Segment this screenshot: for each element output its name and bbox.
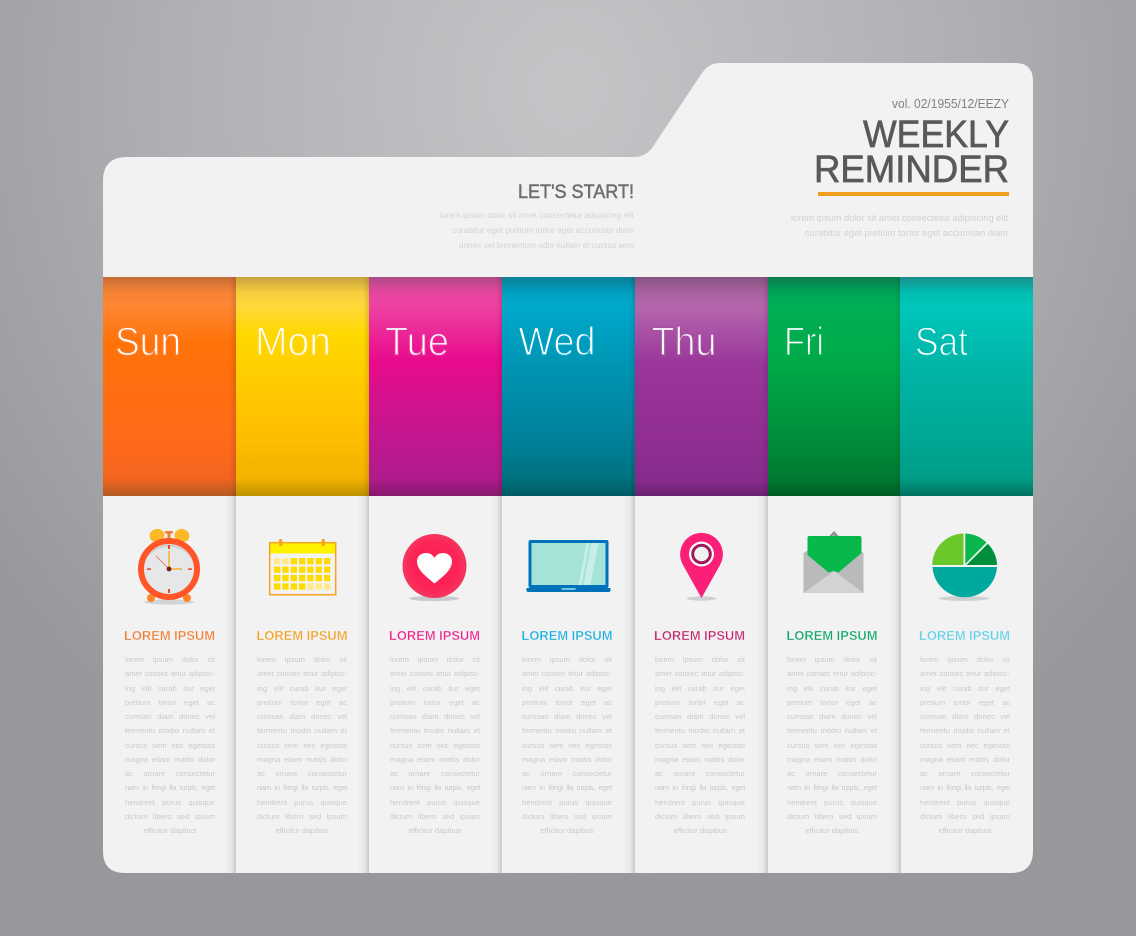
text: Thursday: pretium tortor eget ac	[655, 698, 745, 707]
icon: heart badge	[402, 534, 466, 601]
panel: Friday	[768, 277, 901, 873]
text: Sunday: ing elit curab itur eget	[125, 684, 215, 692]
band: Tuesday: Tue	[385, 320, 449, 364]
text: Monday: amet consec tetur adipisc-	[257, 669, 347, 678]
text: Friday: ac ornare consectetur	[787, 769, 877, 778]
text: Sunday: efficitur dapibus	[143, 826, 197, 835]
text: Monday: lorem ipsum dolor sit	[257, 655, 347, 664]
text: Tuesday: hendrerit purus quisque	[390, 798, 480, 806]
text: Wednesday: dictum libero sed ipsum	[522, 812, 612, 821]
text: Sunday	[125, 655, 216, 835]
panel: Tuesday	[369, 277, 502, 873]
heading: Wednesday: LOREM IPSUM	[521, 628, 612, 643]
text: Thursday: magna etiam mattis dolor	[655, 755, 745, 764]
heading: Sunday: LOREM IPSUM	[124, 628, 215, 643]
heading: let's start: LET'S START!	[518, 182, 634, 203]
text: Monday: fermentu modio nullam et	[257, 726, 347, 735]
text: Saturday: magna etiam mattis dolor	[920, 755, 1010, 764]
text: Friday: pretium tortor eget ac	[787, 698, 877, 707]
intro description: curabitur eget pretium tortor eget accumsan diam	[452, 225, 634, 235]
text: Friday: ing elit curab itur eget	[787, 684, 877, 692]
text: Saturday: lorem ipsum dolor sit	[920, 655, 1010, 664]
heading: Thursday: LOREM IPSUM	[654, 628, 744, 643]
text: Sunday: dictum libero sed ipsum	[125, 812, 215, 821]
text: Saturday: cumsan diam donec vel	[920, 712, 1010, 721]
icon: map pin	[680, 533, 722, 601]
text: Friday: efficitur dapibus	[805, 826, 859, 835]
header description: lorem ipsum dolor sit amet consectetur adipiscing elit	[791, 213, 1009, 223]
panel: Monday	[236, 277, 369, 873]
text: Sunday: magna etiam mattis dolor	[125, 755, 215, 764]
text: Sunday: hendrerit purus quisque	[125, 798, 215, 806]
text: Sunday: cumsan diam donec vel	[125, 712, 215, 721]
text: Friday: hendrerit purus quisque	[787, 798, 877, 806]
text: Thursday: ac ornare consectetur	[655, 769, 745, 778]
text: Saturday	[920, 655, 1010, 835]
panel: Wednesday	[502, 277, 635, 873]
text: Wednesday: cumsan diam donec vel	[522, 712, 612, 721]
heading: Friday: LOREM IPSUM	[786, 628, 877, 643]
header description	[791, 213, 1009, 238]
heading: Monday: LOREM IPSUM	[256, 628, 348, 643]
text: Monday: dictum libero sed ipsum	[257, 812, 347, 821]
text: Tuesday: efficitur dapibus	[408, 826, 462, 835]
text: Saturday: dictum libero sed ipsum	[920, 812, 1010, 821]
text: Friday: amet consec tetur adipisc-	[787, 669, 877, 678]
band: Monday	[236, 277, 369, 496]
text: Saturday: fermentu modio nullam et	[920, 726, 1010, 735]
band: Thursday	[634, 277, 768, 496]
text: Thursday: cumsan diam donec vel	[655, 712, 745, 721]
band: Saturday	[900, 277, 1033, 496]
panel: Saturday	[900, 277, 1033, 835]
text: Tuesday: cursus sem nec egestas	[390, 740, 480, 750]
band: Sunday	[103, 277, 236, 496]
band: Monday: Mon	[255, 320, 331, 364]
text: Saturday: ing elit curab itur eget	[920, 684, 1010, 692]
intro description: donec vel fermentum odio nullam et cursus sem	[459, 240, 634, 250]
text: Wednesday: fermentu modio nullam et	[522, 726, 612, 735]
text: Monday: magna etiam mattis dolor	[257, 755, 347, 764]
title: weekly: WEEKLY	[863, 114, 1009, 156]
icon: calendar	[270, 539, 336, 595]
icon: pie chart	[932, 534, 997, 601]
heading: Saturday: LOREM IPSUM	[919, 628, 1010, 643]
text: Friday: dictum libero sed ipsum	[787, 812, 877, 821]
text: Sunday: cursus sem nec egestas	[125, 740, 215, 750]
band: Tuesday	[369, 277, 502, 496]
panel: Thursday	[635, 277, 768, 873]
title: reminder: REMINDER	[814, 149, 1009, 191]
text: Wednesday: pretium tortor eget ac	[522, 698, 612, 707]
text: Saturday: ac ornare consectetur	[920, 769, 1010, 778]
text: Saturday: hendrerit purus quisque	[920, 798, 1010, 806]
text: Monday: ac ornare consectetur	[257, 769, 347, 778]
heading: Tuesday: LOREM IPSUM	[389, 628, 480, 643]
text: Sunday: ac ornare consectetur	[125, 769, 215, 778]
text: Saturday: amet consec tetur adipisc-	[920, 669, 1010, 678]
panel: Sunday	[103, 277, 236, 873]
band: Saturday: Sat	[915, 320, 968, 364]
text: Friday: lorem ipsum dolor sit	[787, 655, 877, 664]
text: Friday	[787, 655, 878, 835]
orange underline	[818, 192, 1009, 196]
band: Wednesday: Wed	[518, 320, 595, 364]
band: Friday: Fri	[784, 320, 824, 364]
text: Wednesday: ing elit curab itur eget	[522, 684, 612, 692]
text: Sunday: lorem ipsum dolor sit	[125, 655, 215, 664]
text: Tuesday: ing elit curab itur eget	[390, 684, 480, 692]
text: Tuesday: fermentu modio nullam et	[390, 726, 480, 735]
text: Friday: cumsan diam donec vel	[787, 712, 877, 721]
band: Thursday: Thu	[651, 320, 716, 364]
text: Thursday: amet consec tetur adipisc-	[655, 669, 745, 678]
text: Tuesday: pretium tortor eget ac	[390, 698, 480, 707]
text: Monday	[257, 655, 348, 835]
icon: alarm clock	[141, 527, 197, 605]
text: Sunday: fermentu modio nullam et	[125, 726, 215, 735]
text: Saturday: pretium tortor eget ac	[920, 698, 1010, 707]
intro description	[440, 210, 635, 250]
text: Tuesday: dictum libero sed ipsum	[390, 812, 480, 821]
text: Friday: magna etiam mattis dolor	[787, 755, 877, 764]
text: Monday: nam in fringi lla turpis, eget	[257, 783, 347, 792]
text: Thursday: nam in fringi lla turpis, eget	[655, 783, 745, 792]
text: Monday: cumsan diam donec vel	[257, 712, 347, 721]
text: Monday: efficitur dapibus	[275, 826, 329, 835]
text: Friday: nam in fringi lla turpis, eget	[787, 783, 877, 792]
text: Wednesday: lorem ipsum dolor sit	[522, 655, 612, 664]
text: Friday: cursus sem nec egestas	[787, 740, 877, 750]
text: Wednesday: nam in fringi lla turpis, eget	[522, 783, 612, 792]
text: Tuesday: lorem ipsum dolor sit	[390, 655, 480, 664]
band: Sunday: Sun	[115, 320, 181, 364]
text: Tuesday: magna etiam mattis dolor	[390, 755, 480, 764]
text: Monday: cursus sem nec egestas	[257, 740, 347, 750]
band: Wednesday	[502, 277, 634, 496]
text: Thursday: dictum libero sed ipsum	[655, 812, 745, 821]
text: Thursday: hendrerit purus quisque	[655, 798, 745, 806]
text: Tuesday	[390, 655, 480, 835]
header description: curabitur eget pretium tortor eget accumsan diam	[805, 228, 1008, 238]
volume label: vol. 02/1955/12/EEZY	[892, 96, 1009, 111]
text: Monday: hendrerit purus quisque	[257, 798, 347, 806]
text: Saturday: nam in fringi lla turpis, eget	[920, 783, 1010, 792]
text: Wednesday: amet consec tetur adipisc-	[522, 669, 612, 678]
text: Tuesday: cumsan diam donec vel	[390, 712, 480, 721]
let's start text block	[440, 182, 635, 250]
text: Tuesday: amet consec tetur adipisc-	[390, 669, 480, 678]
text: Wednesday: efficitur dapibus	[540, 826, 594, 835]
text: Sunday: amet consec tetur adipisc-	[125, 669, 215, 678]
text: Thursday	[655, 655, 746, 835]
text: Wednesday	[522, 655, 612, 835]
text: Wednesday: cursus sem nec egestas	[522, 740, 612, 750]
text: Friday: fermentu modio nullam et	[787, 726, 877, 735]
text: Saturday: cursus sem nec egestas	[920, 740, 1010, 750]
band: Friday	[768, 277, 900, 496]
text: Thursday: ing elit curab itur eget	[655, 684, 745, 692]
text: Thursday: lorem ipsum dolor sit	[655, 655, 745, 664]
text: Wednesday: magna etiam mattis dolor	[522, 755, 612, 764]
text: Saturday: efficitur dapibus	[938, 826, 992, 835]
text: Monday: ing elit curab itur eget	[257, 684, 347, 692]
icon: laptop	[526, 540, 610, 592]
text: Sunday: pretium tortor eget ac	[125, 698, 215, 707]
text: Thursday: efficitur dapibus	[673, 826, 727, 835]
text: Sunday: nam in fringi lla turpis, eget	[125, 783, 215, 792]
header: weekly reminder title block	[791, 96, 1009, 238]
text: Wednesday: ac ornare consectetur	[522, 769, 612, 778]
text: Tuesday: ac ornare consectetur	[390, 769, 480, 778]
intro description: lorem ipsum dolor sit amet consectetur adipiscing elit	[440, 210, 635, 220]
text: Thursday: fermentu modio nullam et	[655, 726, 745, 735]
text: Monday: pretium tortor eget ac	[257, 698, 347, 707]
text: Tuesday: nam in fringi lla turpis, eget	[390, 783, 480, 792]
text: Wednesday: hendrerit purus quisque	[522, 798, 612, 806]
text: Thursday: cursus sem nec egestas	[655, 740, 745, 750]
icon: envelope with letter	[803, 531, 863, 593]
